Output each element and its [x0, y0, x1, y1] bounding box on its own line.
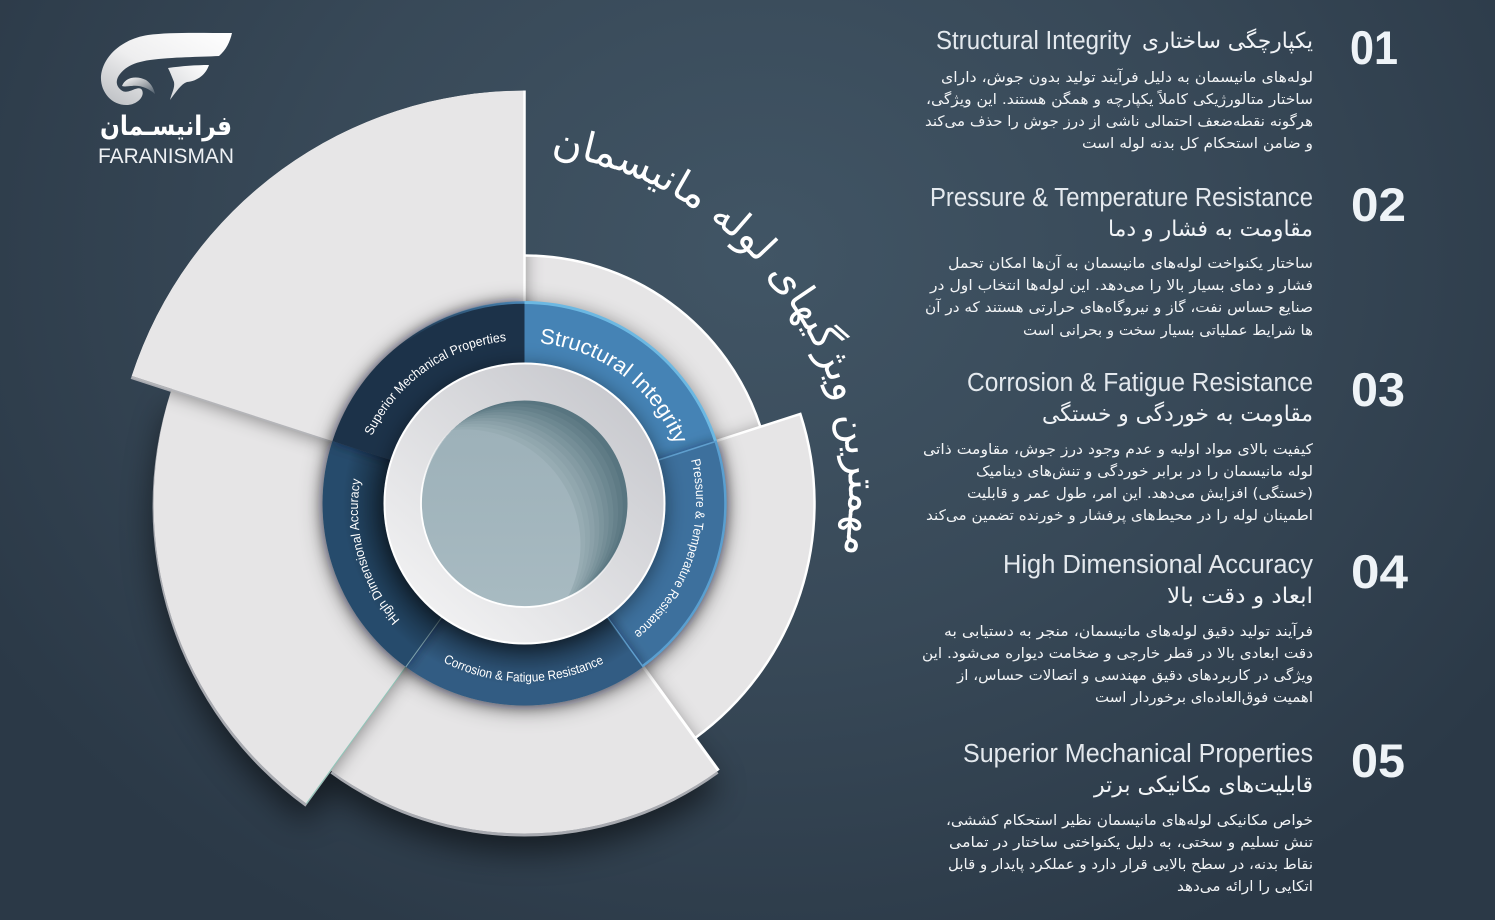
ring label: Pressure and Temperature Resistance: Pressure & Temperature Resistance [634, 458, 704, 637]
heading 02 Persian: مقاومت به فشار و دما [1108, 217, 1313, 242]
logo mark: swirl [122, 78, 155, 94]
heading 01 Persian: یکپارچگی ساختاری [1142, 28, 1313, 54]
sector lower lips [131, 94, 718, 837]
teal centre disc [422, 400, 628, 606]
body 03: اطمینان لوله را در محیط‌های پرفشار و خورنده تضمین می‌کند [926, 508, 1313, 524]
heading 05 Persian: قابلیت‌های مکانیکی برتر [1093, 773, 1313, 798]
segment 4 [323, 441, 524, 667]
body 01 [925, 68, 1313, 152]
logo Latin wordmark: FARANISMAN [98, 145, 234, 168]
logo mark: F bar [168, 65, 209, 100]
segment 1 [524, 302, 717, 504]
number 04: 04 [1351, 545, 1408, 598]
section 01: Structural Integrity [925, 21, 1398, 152]
body 01: ساختار متالورژیکی کاملاً یکپارچه و همگن هستند. این ویژگی، [926, 90, 1313, 108]
heading 03 Persian: مقاومت به خوردگی و خستگی [1042, 401, 1313, 427]
teal disc rim [421, 400, 628, 607]
body 02: ها شرایط عملیاتی بسیار سخت و بحرانی است [1023, 323, 1313, 339]
logo mark: wing [101, 33, 232, 105]
ring edge highlights [400, 302, 725, 667]
body 04 [922, 622, 1313, 706]
wedge 5: Mechanical Properties sector [132, 90, 524, 504]
body 01: هرگونه نقطه‌ضعف احتمالی ناشی از درز جوش را حذف می‌کند [925, 113, 1313, 130]
wedge 3: Corrosion sector [331, 663, 718, 834]
heading 03 English: Corrosion & Fatigue Resistance [967, 369, 1313, 397]
soft shadow under sectors [154, 407, 718, 852]
body 05: تنش تسلیم و سختی، به دلیل یکنواختی ساختار در تمامی [949, 835, 1313, 851]
wedge 4: Dimensional Accuracy sector [154, 389, 414, 804]
body 04: ویژگی در کاربردهای دقیق مهندسی و اتصالات حساس، از [956, 667, 1313, 684]
body 01: لوله‌های مانیسمان به دلیل فرآیند تولید بدون جوش، دارای [941, 68, 1313, 86]
body 03: لوله مانیسمان را در برابر خوردگی و تنش‌های دینامیک [976, 463, 1313, 480]
sector edge lines [132, 90, 814, 804]
segment 1 overlap [524, 302, 643, 504]
body 05: نقاط بدنه، در سطح بالایی قرار دارد و عملکرد پایدار و قابل [948, 857, 1313, 873]
heading 01 English: Structural Integrity [936, 27, 1131, 55]
section 05: Superior Mechanical Properties [946, 734, 1405, 895]
number 05: 05 [1351, 734, 1405, 787]
segment 5 [332, 302, 524, 504]
sector stack [132, 90, 814, 834]
body 03: (خستگی) افزایش می‌دهد. این امر، طول عمر و قابلیت [967, 485, 1313, 502]
segment 2 [524, 441, 726, 667]
body 02: فشار و دمای بسیار بالا را می‌دهد. این لوله‌ها انتخاب اول در [929, 278, 1313, 294]
number 01: 01 [1350, 21, 1398, 74]
heading 05 English: Superior Mechanical Properties [963, 740, 1313, 768]
body 03: کیفیت بالای مواد اولیه و عدم وجود درز جوش، مقاومت ذاتی [923, 442, 1313, 458]
number 02: 02 [1351, 178, 1406, 231]
body 05 [946, 813, 1313, 895]
body 04: اهمیت فوق‌العاده‌ای برخوردار است [1095, 690, 1313, 706]
section 02: Pressure and Temperature Resistance [925, 178, 1406, 339]
body 04: دقت ابعادی بالا در قطر خارجی و ضخامت دیواره می‌شود. این [922, 646, 1313, 662]
body 04: فرآیند تولید دقیق لوله‌های مانیسمان، منجر به دستیابی به [944, 622, 1313, 640]
white centre ring [384, 364, 664, 644]
heading 02 English: Pressure & Temperature Resistance [930, 184, 1313, 212]
body 02 [925, 254, 1313, 339]
ring label: Superior Mechanical Properties: Superior Mechanical Properties [365, 334, 506, 435]
body 01: و ضامن استحکام کل بدنه لوله است [1082, 136, 1313, 152]
ring label: Structural Integrity: Structural Integrity [540, 329, 686, 441]
segment 3 [406, 504, 643, 705]
radial diagram [130, 90, 816, 865]
number 03: 03 [1351, 363, 1405, 416]
logo: Faranisman [98, 33, 234, 168]
ring inner shade [323, 441, 643, 705]
wedge 2: Pressure sector [644, 416, 814, 736]
wedge 1: Structural Integrity sector [526, 256, 759, 440]
body 03 [923, 442, 1313, 524]
body 02: صنایع حساس نفت، گاز و نیروگاه‌های حرارتی هستند که در آن [925, 298, 1313, 316]
section 04: High Dimensional Accuracy [922, 545, 1408, 706]
heading 04 English: High Dimensional Accuracy [1003, 551, 1313, 579]
curved title: مهمترین ویژگیهای لوله مانیسمان [554, 130, 869, 552]
ring label: High Dimensional Accuracy: High Dimensional Accuracy [350, 478, 400, 626]
body 05: اتکایی را ارائه می‌دهد [1177, 879, 1313, 895]
body 05: خواص مکانیکی لوله‌های مانیسمان نظیر استحکام کششی، [946, 813, 1313, 829]
segmented blue ring [323, 302, 726, 705]
logo Persian wordmark: فرانیسـمان [100, 111, 232, 142]
ring label: Corrosion and Fatigue Resistance: Corrosion & Fatigue Resistance [444, 655, 603, 684]
heading 04 Persian: ابعاد و دقت بالا [1167, 584, 1313, 609]
body 02: ساختار یکنواخت لوله‌های مانیسمان به آن‌ها امکان تحمل [948, 254, 1313, 272]
section 03: Corrosion and Fatigue Resistance [923, 363, 1405, 524]
